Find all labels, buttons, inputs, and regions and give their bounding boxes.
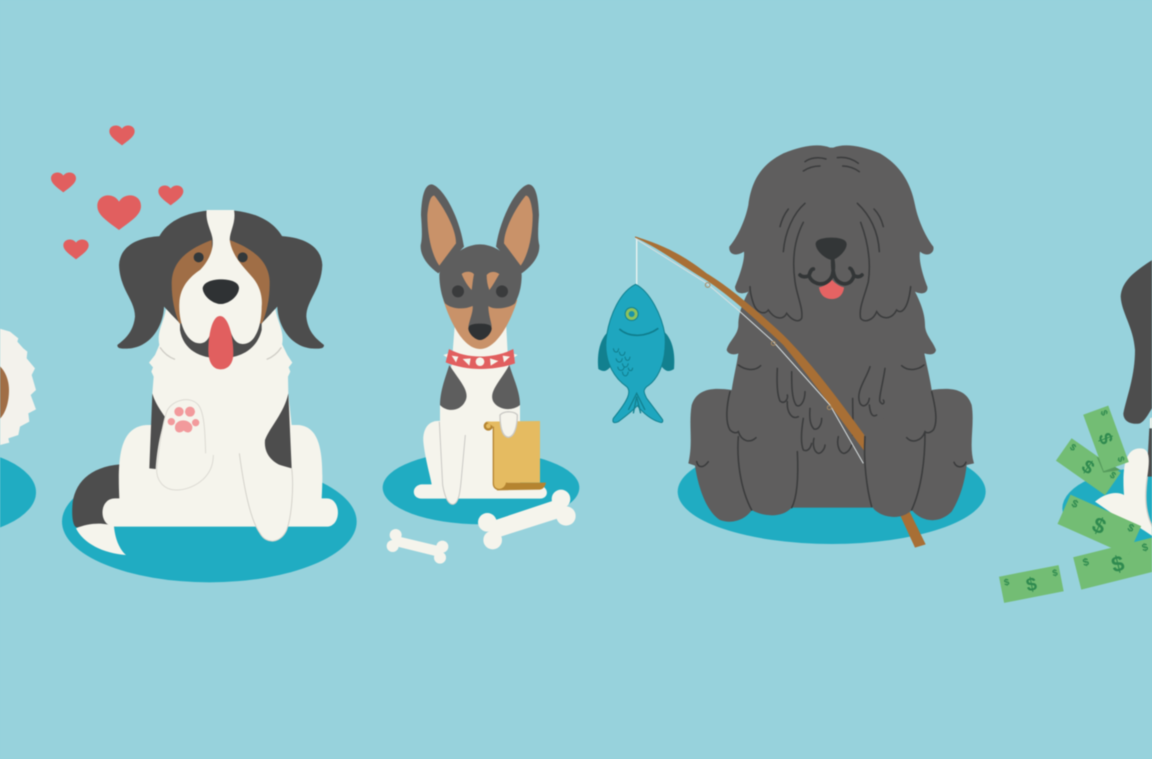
bill: top: $ <box>1115 455 1127 464</box>
heart 4 <box>97 195 141 230</box>
money bills <box>999 406 1152 603</box>
left brown <box>172 240 213 323</box>
brows <box>462 272 474 290</box>
back haunch and feet <box>414 421 547 499</box>
front leg over rod <box>864 418 926 517</box>
haunch <box>1095 448 1152 537</box>
bill: upper left: $ <box>1068 442 1079 453</box>
fish body <box>606 284 665 423</box>
bill: top shadow <box>1097 457 1121 473</box>
paw on scroll <box>500 412 517 437</box>
mouth <box>619 328 658 335</box>
eyes <box>194 252 204 262</box>
right body patch <box>265 393 292 468</box>
fish on line <box>598 238 674 423</box>
bill: top: $ <box>1094 430 1118 447</box>
nose <box>816 238 847 260</box>
left inner ear <box>427 196 456 266</box>
scroll <box>484 421 546 490</box>
bill: center <box>1058 495 1141 555</box>
small bone <box>387 529 448 564</box>
eyes <box>452 285 464 297</box>
body <box>440 322 520 498</box>
tail rays <box>628 393 645 413</box>
jaw <box>180 317 262 358</box>
nose <box>468 324 492 340</box>
tongue <box>208 316 233 369</box>
head top <box>158 210 283 323</box>
bill: upper left: $ <box>1108 470 1118 481</box>
leg outline <box>1146 477 1152 528</box>
hearts <box>51 125 183 259</box>
dog: Saint Bernard with raised paw <box>62 210 357 582</box>
white chest strip <box>1150 417 1152 428</box>
heart 2 <box>51 172 76 192</box>
right ear <box>235 236 324 349</box>
dog: cropped dog with money at right edge <box>1062 259 1152 550</box>
left body patch <box>149 393 166 469</box>
dog: cropped fluffy dog at left edge <box>0 328 36 537</box>
eye <box>625 307 639 321</box>
fishing rod <box>635 236 864 451</box>
bill: upper left <box>1056 438 1121 495</box>
right fin <box>662 332 674 371</box>
fishing line drop <box>635 238 639 286</box>
bill: center: $ <box>1088 512 1110 539</box>
bill: ground left <box>999 565 1064 603</box>
heart 1 <box>109 125 135 145</box>
paw pads <box>168 407 199 432</box>
front leg <box>439 422 465 504</box>
right ear <box>496 184 539 273</box>
neck white <box>159 309 283 345</box>
rod rings <box>705 283 831 410</box>
bill: ground left: $ <box>1024 573 1039 595</box>
body <box>102 343 338 527</box>
bill: top <box>1083 406 1129 471</box>
head mask <box>439 244 522 327</box>
tan face <box>443 300 517 349</box>
raised leg <box>157 400 213 490</box>
bill: center shadow <box>1108 533 1137 555</box>
cushion <box>383 451 579 524</box>
big bone <box>478 490 576 549</box>
right inner ear <box>504 196 533 266</box>
cushion <box>678 439 986 544</box>
neck folds <box>160 347 281 359</box>
left shoulder patch <box>440 365 467 410</box>
right shoulder patch <box>492 365 520 409</box>
cushion <box>62 461 357 582</box>
tail tip <box>76 524 126 555</box>
dog: shaggy dog with fishing rod <box>635 145 986 548</box>
right brown <box>228 240 270 323</box>
left ear <box>117 236 207 349</box>
tongue <box>819 279 844 299</box>
bill: ground right: $ <box>1082 556 1090 569</box>
shaggy body <box>688 145 974 522</box>
fishing line <box>635 238 863 463</box>
bill: center: $ <box>1070 497 1080 511</box>
front leg lines <box>865 392 936 510</box>
rod lower end <box>900 511 926 548</box>
bill: ground left: $ <box>1003 577 1011 588</box>
tail <box>72 464 127 527</box>
left fin <box>598 332 611 371</box>
bill: ground right: $ <box>1109 550 1127 577</box>
bill: center: $ <box>1126 522 1136 535</box>
collar <box>443 349 518 369</box>
heart 3 <box>158 185 183 205</box>
bill: ground left: $ <box>1051 567 1059 578</box>
left ear <box>421 184 464 273</box>
dark leg strip <box>1147 428 1152 477</box>
front leg <box>239 453 293 541</box>
bill: top: $ <box>1099 409 1110 418</box>
nose <box>203 279 239 304</box>
scales <box>613 348 633 376</box>
blaze and muzzle <box>179 210 262 344</box>
mouth <box>800 259 862 284</box>
dog: terrier with scroll <box>383 184 579 564</box>
bill: ground right: $ <box>1141 541 1149 554</box>
ear <box>1121 259 1152 424</box>
cushion <box>1062 467 1152 550</box>
bill: upper left: $ <box>1078 455 1099 479</box>
fur lines <box>697 157 966 510</box>
bill: ground right <box>1073 537 1152 590</box>
heart 5 <box>63 239 89 259</box>
